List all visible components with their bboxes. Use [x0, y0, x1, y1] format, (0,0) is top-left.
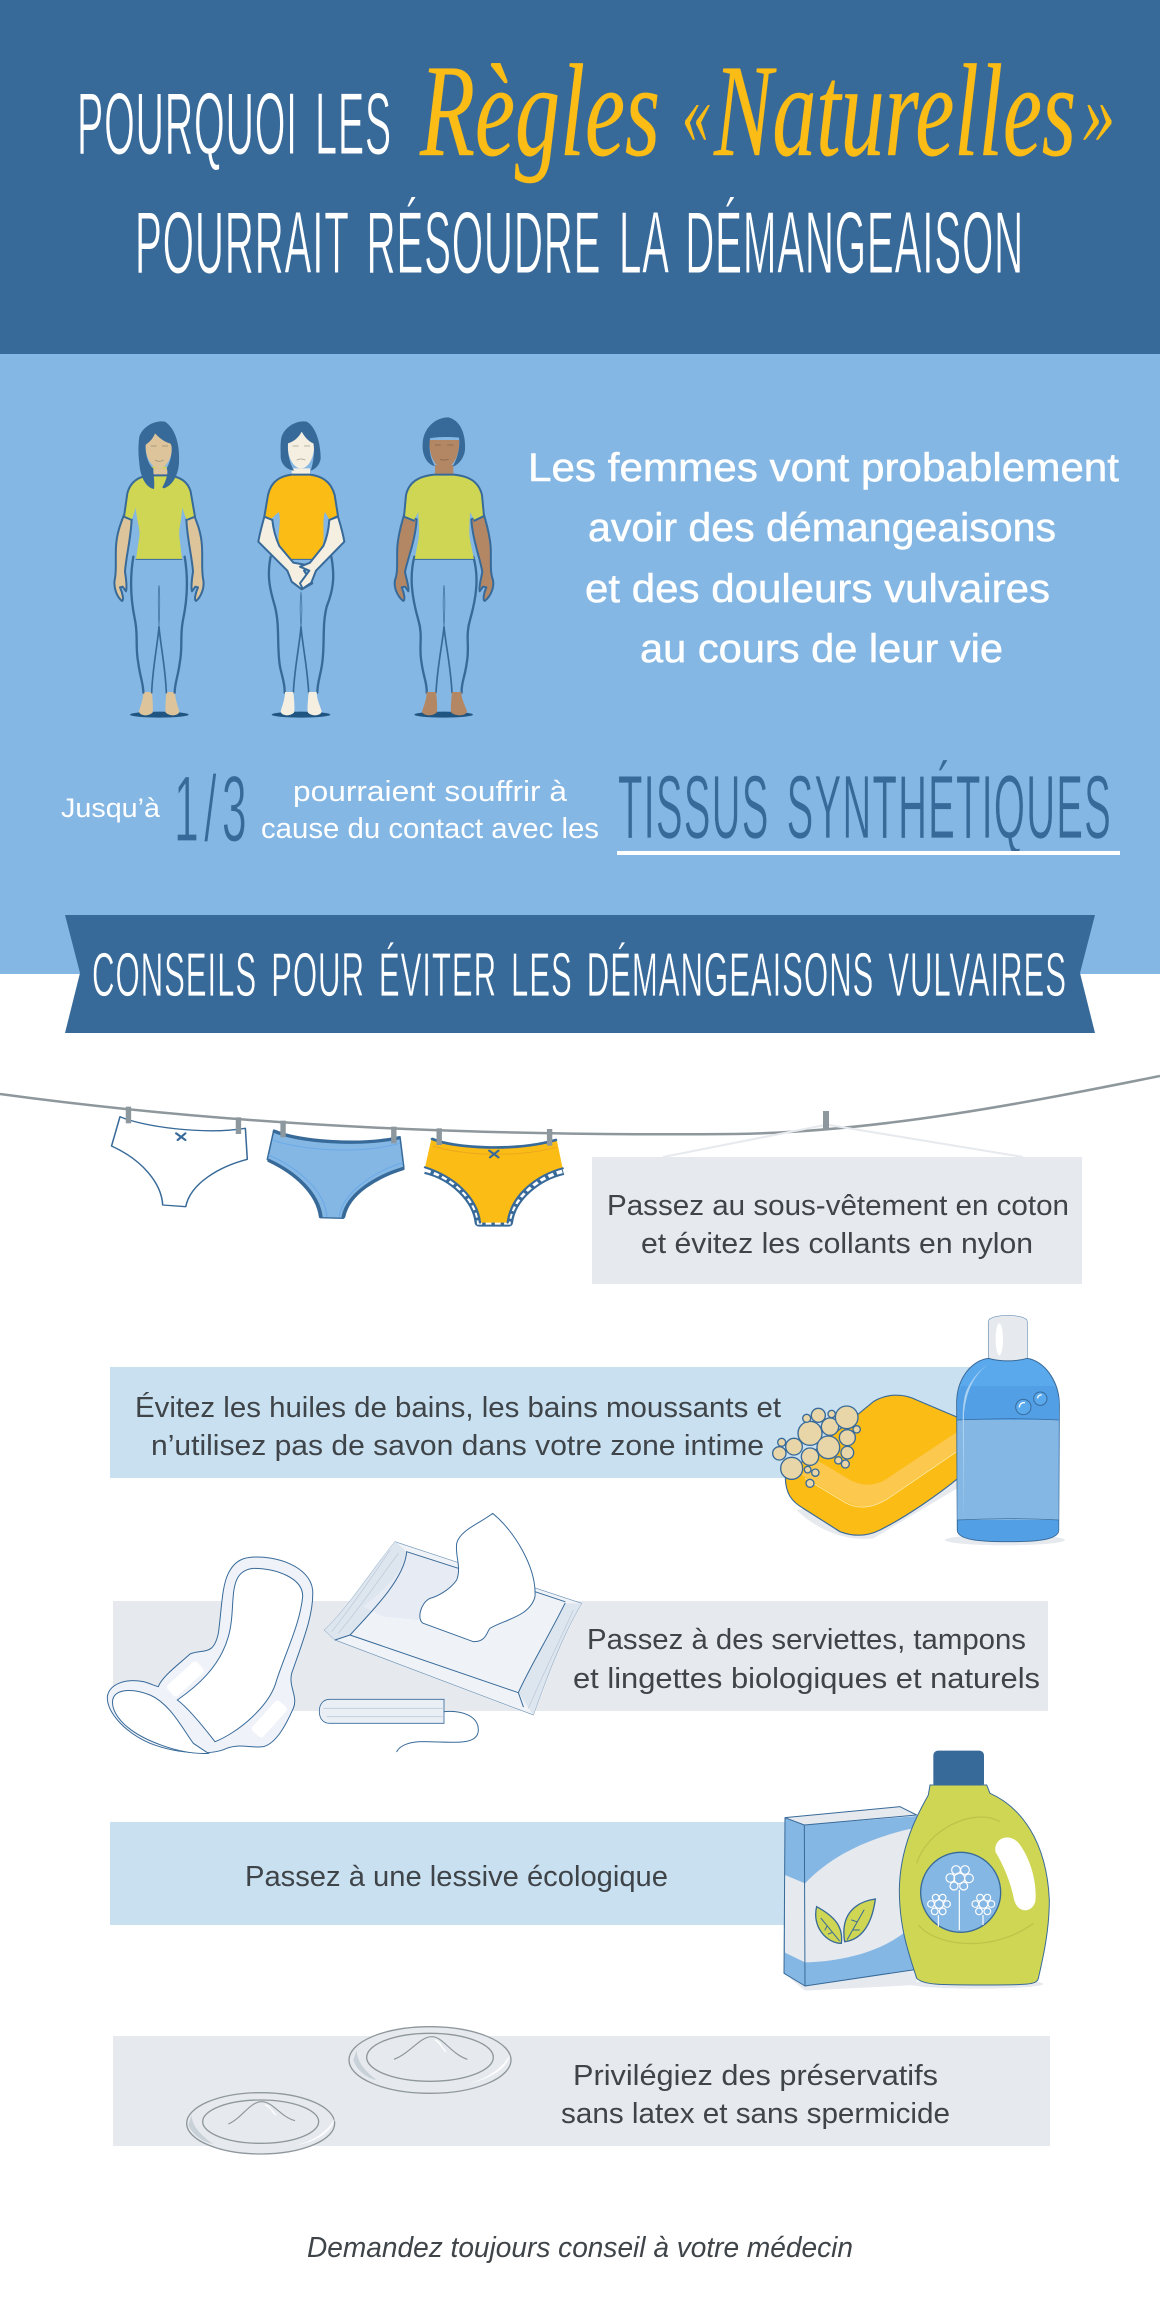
- tip panel: ecological laundry detergent: [110, 1822, 790, 1925]
- panel: light blue intro: [0, 354, 1160, 974]
- tip panel: latex-free condoms: sans latex et sans spermicide: [561, 2098, 950, 2130]
- tip panel: latex-free condoms: Privilégiez des préservatifs: [573, 2060, 938, 2092]
- panel: header: [0, 0, 1160, 354]
- tip panel: cotton underwear: [592, 1157, 1082, 1284]
- tip panel: latex-free condoms: [113, 2036, 1050, 2146]
- icon: yellow lace underwear: [425, 1128, 563, 1223]
- statistic: one third synthetic fabrics: cause du contact avec les: [261, 813, 599, 845]
- tip panel: soap and bath oils: Évitez les huiles de bains, les bains moussants et: [135, 1391, 781, 1424]
- condom right: [349, 2027, 511, 2093]
- tip panel: organic pads: et lingettes biologiques et naturels: [573, 1663, 1040, 1695]
- tip panel: cotton underwear: et évitez les collants en nylon: [641, 1228, 1033, 1260]
- text block: women statement: Les femmes vont probablement: [528, 446, 1119, 490]
- icon: bath oil bottle: [945, 1315, 1065, 1545]
- icon: soap bar with bubbles: [773, 1395, 960, 1539]
- clothesline: [0, 1076, 1160, 1157]
- icon: washing powder box: [784, 1807, 917, 1991]
- title: script highlight: Règles: [419, 37, 660, 184]
- banner: conseils: [65, 915, 1095, 1033]
- woman one: [114, 421, 204, 718]
- icon: sanitary pad: [107, 1557, 313, 1753]
- text block: women statement: [528, 446, 1119, 671]
- text block: women statement: avoir des démangeaisons: [588, 506, 1056, 550]
- tip panel: soap and bath oils: n’utilisez pas de savon dans votre zone intime: [151, 1430, 764, 1462]
- woman three: [395, 417, 493, 718]
- leaves: [816, 1899, 875, 1943]
- tip panel: organic pads: [113, 1601, 1048, 1711]
- tip panel: cotton underwear: Passez au sous-vêtement en coton: [607, 1190, 1069, 1222]
- icon: blue underwear: [267, 1121, 404, 1218]
- panel: header: POURQUOI LES: [77, 74, 392, 173]
- title: script highlight: [419, 37, 1115, 184]
- woman two, hands crossed: [258, 421, 344, 718]
- statistic: one third synthetic fabrics: pourraient souffrir à: [293, 776, 568, 808]
- illustration: three women: [114, 417, 493, 718]
- title: script highlight: »: [1083, 64, 1115, 163]
- icon: detergent bottle: [899, 1751, 1049, 1989]
- tip panel: organic pads: Passez à des serviettes, tampons: [587, 1624, 1026, 1656]
- text block: women statement: et des douleurs vulvaires: [585, 567, 1050, 611]
- statistic: one third synthetic fabrics: Jusqu’à: [61, 793, 161, 823]
- icon: white underwear: [112, 1107, 247, 1207]
- icon: tampon: [319, 1699, 478, 1752]
- statistic: one third synthetic fabrics: 1/3: [174, 756, 252, 861]
- icon: wipes packet: [324, 1513, 582, 1715]
- tip panel: ecological laundry detergent: Passez à une lessive écologique: [245, 1861, 668, 1893]
- icon: condoms: [187, 2027, 511, 2154]
- tip panel: soap and bath oils: [110, 1367, 970, 1478]
- title: script highlight: «: [682, 64, 710, 163]
- statistic: one third synthetic fabrics: [61, 756, 1120, 861]
- condom left: [187, 2093, 335, 2154]
- text block: women statement: au cours de leur vie: [640, 627, 1003, 671]
- flowers: [928, 1866, 995, 1930]
- footer note: Demandez toujours conseil à votre médecin: [307, 2232, 853, 2264]
